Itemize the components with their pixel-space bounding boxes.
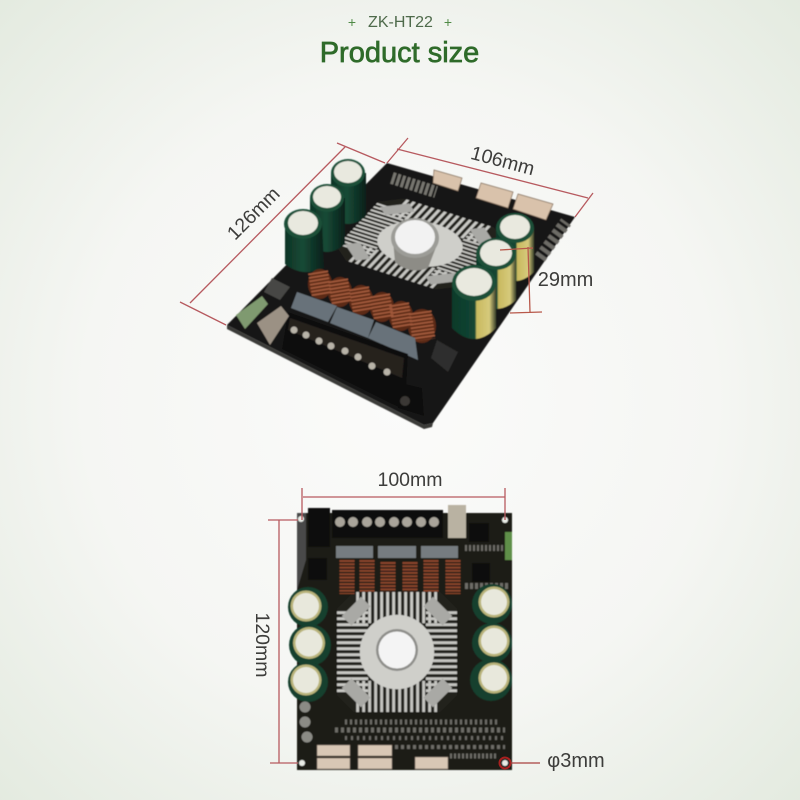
film capacitors (291, 292, 418, 360)
bluetooth module (505, 532, 512, 560)
terminal block (282, 312, 408, 410)
right capacitors (470, 584, 512, 701)
height dimension 29mm (500, 247, 593, 313)
silk components (335, 548, 508, 756)
width dimension 106mm: 106mm (468, 142, 537, 180)
power jack (308, 508, 330, 547)
length dimension 120mm: 120mm (251, 612, 273, 678)
width dimension 100mm (302, 469, 505, 520)
mounting holes (298, 516, 508, 766)
board photo, perspective view (227, 159, 575, 429)
hole diameter callout: φ3mm (547, 750, 605, 772)
width dimension 106mm (387, 138, 593, 217)
left plus ornament: + (348, 14, 356, 30)
small capacitors (300, 702, 312, 742)
coils (347, 560, 453, 594)
switch (257, 306, 289, 345)
terminal screws (335, 517, 439, 527)
length dimension 120mm (251, 520, 298, 763)
terminal block (332, 510, 443, 538)
diode (431, 340, 458, 372)
switch (448, 505, 466, 538)
power jack (397, 382, 424, 416)
model label: ZK-HT22 (368, 14, 433, 31)
heatsink (337, 592, 457, 712)
hub (393, 240, 438, 270)
terminal screws (290, 326, 390, 376)
panel: perspective board (180, 138, 593, 429)
left capacitors (284, 159, 366, 272)
heatsink (328, 193, 512, 295)
title: Product size (320, 37, 479, 69)
hub (376, 629, 418, 671)
silk details (392, 178, 436, 192)
bottom connectors (317, 745, 448, 769)
length dimension 126mm: 126mm (223, 183, 285, 245)
left capacitors (288, 587, 331, 702)
bluetooth module (236, 296, 268, 329)
ic chip (472, 563, 490, 582)
diode (308, 558, 327, 580)
pcb (227, 163, 575, 425)
header (320, 14, 479, 69)
inductor (469, 523, 489, 542)
panel: top-view board (251, 469, 605, 772)
board photo, top view (288, 505, 512, 770)
length dimension 126mm (180, 143, 385, 325)
width dimension 100mm: 100mm (377, 469, 443, 491)
coils (308, 269, 436, 343)
right capacitors (452, 213, 534, 339)
connectors (433, 170, 553, 220)
pcb (297, 513, 512, 770)
film capacitors (336, 546, 458, 558)
hole diameter callout (500, 750, 605, 772)
height dimension 29mm: 29mm (538, 269, 593, 291)
right plus ornament: + (444, 14, 452, 30)
